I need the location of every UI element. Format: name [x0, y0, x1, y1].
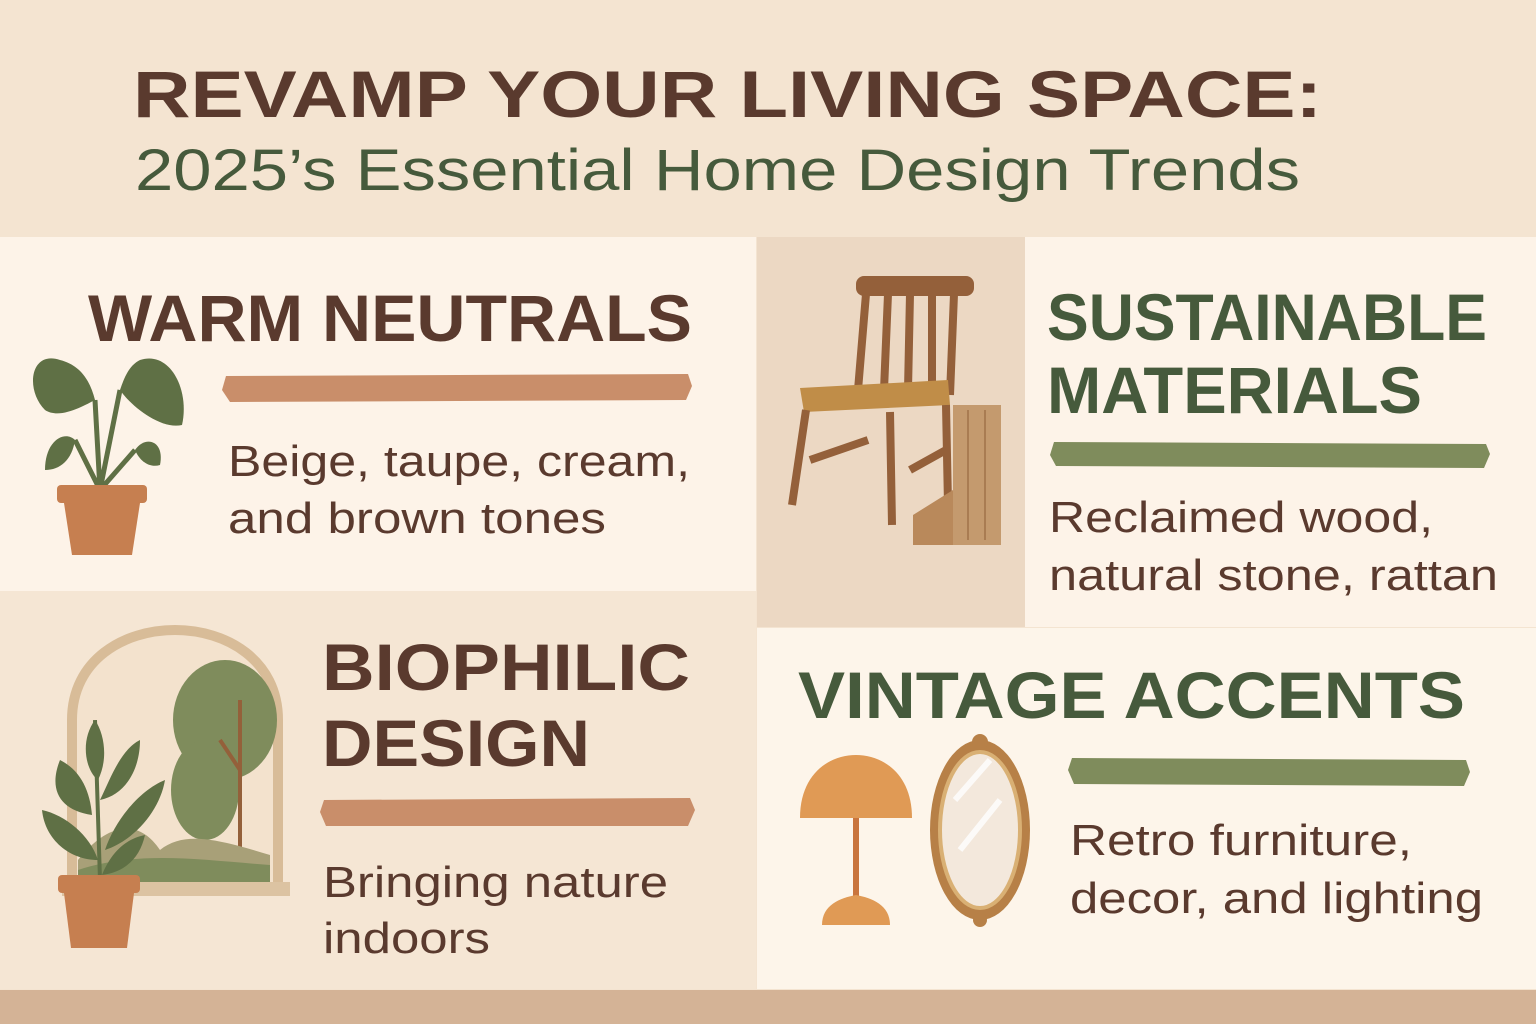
panel: vintage accents: decor, and lighting [1070, 874, 1483, 923]
heading: warm neutrals: WARM NEUTRALS [88, 281, 692, 355]
panel: sustainable materials [1025, 237, 1536, 627]
footer band [0, 990, 1536, 1024]
panel: warm neutrals: and brown tones [228, 494, 606, 543]
heading: vintage accents: VINTAGE ACCENTS [798, 658, 1465, 732]
brush stroke [1068, 758, 1470, 786]
heading: sustainable materials: SUSTAINABLE [1047, 280, 1487, 354]
icon: chair with wood planks [792, 276, 1001, 545]
panel: chair image [757, 237, 1025, 627]
panel: biophilic design: DESIGN [322, 706, 590, 780]
description: Bringing nature [323, 858, 668, 907]
panel: sustainable materials: natural stone, rattan [1049, 551, 1498, 600]
panel: warm neutrals [0, 237, 756, 591]
description: Retro furniture, [1070, 816, 1412, 865]
brush stroke [222, 374, 692, 402]
brush stroke [1050, 442, 1490, 468]
header [133, 57, 1322, 203]
description: Beige, taupe, cream, [228, 437, 690, 486]
subtitle: 2025’s Essential Home Design Trends [135, 138, 1300, 203]
heading: biophilic design: BIOPHILIC [322, 630, 690, 704]
panel: biophilic design: indoors [323, 914, 490, 963]
icon: table lamp [800, 755, 912, 925]
icon: oval mirror [930, 734, 1030, 927]
panel: biophilic design [0, 591, 756, 989]
panel: sustainable materials: MATERIALS [1047, 353, 1422, 427]
brush stroke [320, 798, 695, 826]
icon: potted plant [33, 358, 184, 555]
title: REVAMP YOUR LIVING SPACE: [133, 57, 1322, 131]
description: Reclaimed wood, [1049, 493, 1433, 542]
icon: arched window with plant [42, 630, 290, 948]
panel: vintage accents [757, 628, 1536, 989]
